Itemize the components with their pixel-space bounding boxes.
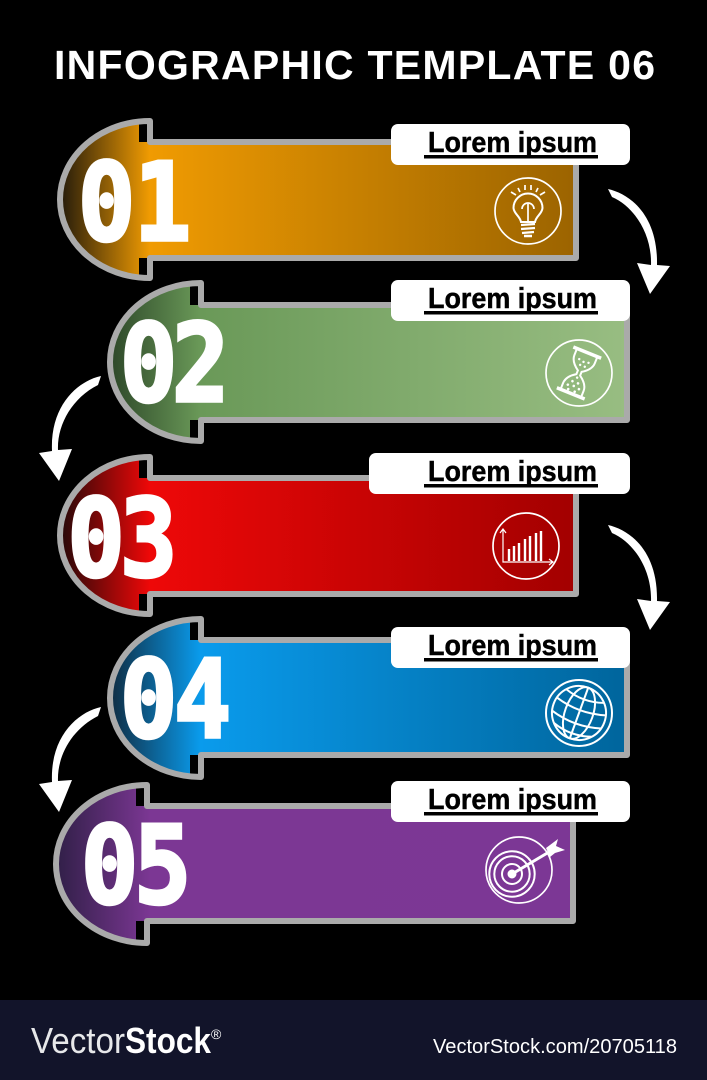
number 04: 4	[174, 637, 231, 762]
number 04	[120, 637, 231, 762]
number 01: 0	[78, 140, 135, 265]
number 02: 2	[172, 301, 229, 426]
footer image id: VectorStock.com/20705118	[433, 1036, 677, 1058]
label: Lorem ipsum: Lorem ipsum	[428, 630, 597, 662]
panel: step 05	[56, 781, 630, 943]
arrow: step 2 to 3	[39, 376, 101, 481]
arrow: step 4 to 5	[39, 707, 101, 812]
footer logo	[31, 1020, 222, 1061]
label: Lorem ipsum: Lorem ipsum	[428, 127, 597, 159]
title: INFOGRAPHIC TEMPLATE 06	[54, 42, 655, 88]
footer logo: ®	[211, 1026, 222, 1042]
number 03	[68, 476, 177, 601]
arrow: step 3 to 4	[608, 525, 670, 630]
label: Lorem ipsum	[391, 781, 630, 822]
label: Lorem ipsum	[391, 280, 630, 321]
icon: light bulb	[495, 178, 561, 244]
panel: step 04	[110, 619, 630, 777]
icon: bar chart	[493, 513, 559, 579]
number 04: 0	[120, 637, 177, 762]
number 05: 0	[81, 803, 138, 928]
label: Lorem ipsum: Lorem ipsum	[428, 784, 597, 816]
icon: globe	[544, 678, 614, 748]
label: Lorem ipsum: Lorem ipsum	[428, 283, 597, 315]
number 01: 1	[134, 140, 191, 265]
number 01	[78, 140, 191, 265]
label: Lorem ipsum	[391, 627, 630, 668]
footer logo: Vector	[31, 1020, 125, 1061]
footer bar	[0, 1000, 707, 1080]
icon: hourglass	[546, 340, 612, 406]
label: Lorem ipsum	[369, 453, 630, 494]
panel: step 03	[60, 453, 630, 614]
number 05: 5	[134, 803, 191, 928]
number 03: 0	[68, 476, 125, 601]
footer logo: Stock	[125, 1020, 212, 1061]
label: Lorem ipsum	[391, 124, 630, 165]
number 05	[81, 803, 191, 928]
number 03: 3	[120, 476, 177, 601]
label: Lorem ipsum: Lorem ipsum	[428, 456, 597, 488]
number 02	[120, 301, 229, 426]
panel: step 01	[60, 121, 630, 278]
arrow: step 1 to 2	[608, 189, 670, 294]
icon: target with arrow	[486, 837, 565, 903]
panel: step 02	[110, 280, 630, 441]
number 02: 0	[120, 301, 177, 426]
